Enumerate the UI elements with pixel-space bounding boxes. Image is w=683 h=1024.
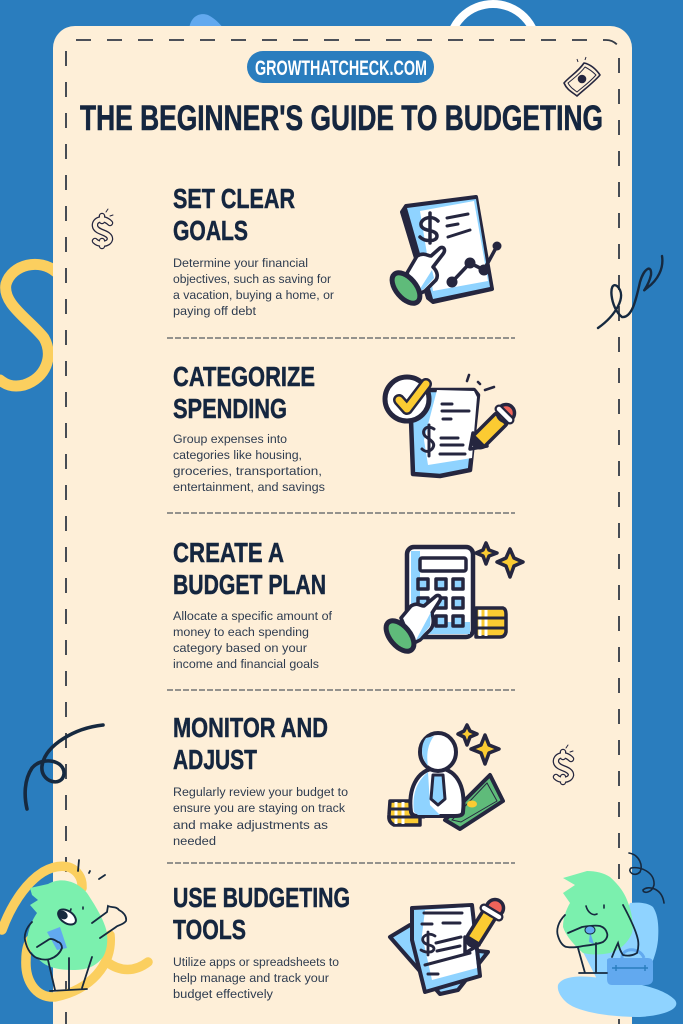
heading xyxy=(173,361,315,424)
decoration: white ring behind card xyxy=(449,4,537,92)
description: a vacation, buying a home, or xyxy=(173,288,334,302)
heading: SET CLEAR xyxy=(173,183,295,214)
dashed stitched border xyxy=(66,40,619,1024)
description: Utilize apps or spreadsheets to xyxy=(173,955,339,969)
description: categories like housing, xyxy=(173,448,302,462)
heading xyxy=(173,537,326,600)
heading xyxy=(173,882,350,945)
description: help manage and track your xyxy=(173,971,329,985)
icon: person with money and coins xyxy=(389,725,503,829)
heading xyxy=(173,183,295,246)
heading: BUDGET PLAN xyxy=(173,569,326,600)
icon: calculator with coins and hand xyxy=(381,543,523,656)
description xyxy=(173,609,333,671)
decoration: blue blob behind card xyxy=(189,14,226,32)
description: income and financial goals xyxy=(173,657,319,671)
description: Regularly review your budget to xyxy=(173,785,348,799)
description: Determine your financial xyxy=(173,256,308,270)
section: create a budget plan xyxy=(173,537,523,671)
description: Group expenses into xyxy=(173,432,287,446)
icon: small banknote doodle xyxy=(564,57,600,96)
heading: GOALS xyxy=(173,215,248,246)
website pill xyxy=(247,51,434,83)
divider 2 xyxy=(167,512,515,514)
heading: SPENDING xyxy=(173,393,287,424)
description: money to each spending xyxy=(173,625,309,639)
description: budget effectively xyxy=(173,987,274,1001)
heading: CATEGORIZE xyxy=(173,361,315,392)
divider 3 xyxy=(167,689,515,691)
divider 4 xyxy=(167,862,515,864)
description: entertainment, and savings xyxy=(173,480,325,494)
icon: small dollar doodle left xyxy=(95,209,113,246)
description xyxy=(173,432,325,494)
description: and make adjustments as xyxy=(173,818,328,832)
icon: documents with pencil xyxy=(390,900,504,994)
icon: small dollar doodle right xyxy=(556,745,573,782)
heading: TOOLS xyxy=(173,914,246,945)
decoration: dark scribble left xyxy=(25,725,103,809)
heading: MONITOR AND xyxy=(173,712,328,743)
icon: document with chart and hand xyxy=(387,197,502,308)
character: left green figure waving with yellow loop xyxy=(2,860,148,997)
heading: ADJUST xyxy=(173,744,257,775)
section: categorize spending xyxy=(173,361,514,494)
character: right green figure with bag on blue blob xyxy=(557,871,676,1017)
section: use budgeting tools xyxy=(173,882,504,1001)
description xyxy=(173,785,348,848)
section: set clear goals xyxy=(173,183,502,318)
description: groceries, transportation, xyxy=(173,464,322,478)
description: ensure you are staying on track xyxy=(173,801,346,815)
description: objectives, such as saving for xyxy=(173,272,331,286)
section: monitor and adjust xyxy=(173,712,503,848)
description xyxy=(173,256,334,318)
description: paying off debt xyxy=(173,304,257,318)
heading: USE BUDGETING xyxy=(173,882,350,913)
icon: checklist with check badge and pencil xyxy=(385,375,514,476)
description: needed xyxy=(173,834,216,848)
decoration: yellow squiggle left xyxy=(0,264,56,386)
description: Allocate a specific amount of xyxy=(173,609,333,623)
heading: CREATE A xyxy=(173,537,284,568)
decoration: dark scribble right xyxy=(598,256,662,328)
heading xyxy=(173,712,328,775)
description xyxy=(173,955,339,1001)
website pill: GROWTHATCHECK.COM xyxy=(255,57,427,80)
description: category based on your xyxy=(173,641,307,655)
decoration: scribble bottom right xyxy=(629,853,664,903)
divider 1 xyxy=(167,337,515,339)
